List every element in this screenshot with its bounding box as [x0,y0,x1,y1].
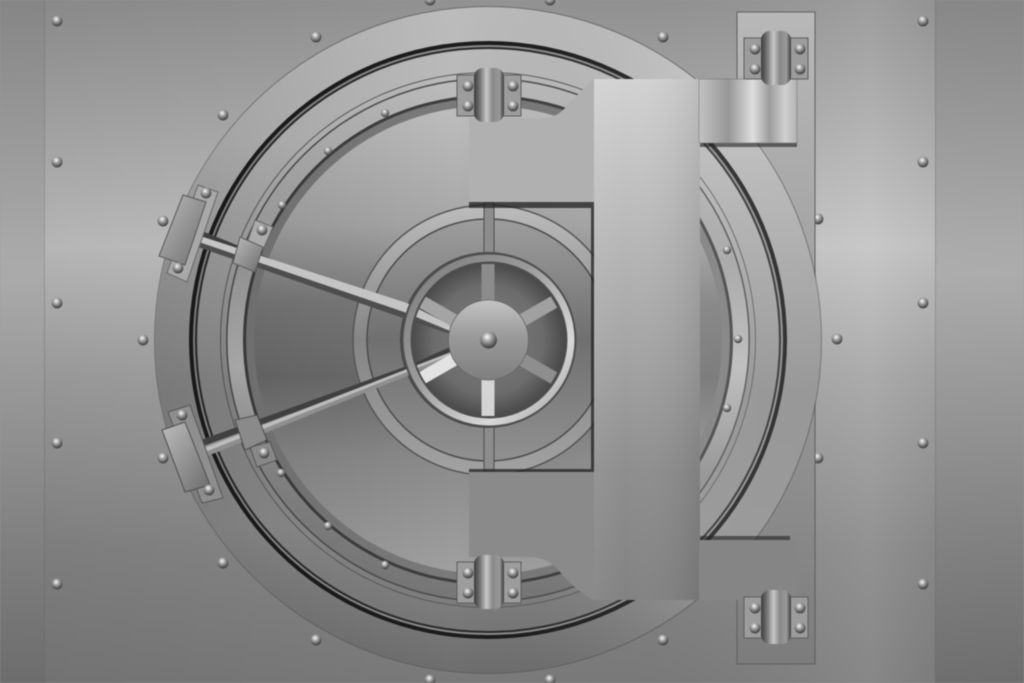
handwheel [407,258,571,422]
locking bars [195,229,452,459]
top arm [699,79,797,143]
vertical column [594,79,700,600]
lower recess plate [469,472,594,600]
door clamps [457,31,808,644]
upper recess plate [469,79,594,202]
vault door: concentric rings [154,6,822,674]
hub bolt [480,332,497,348]
door ring rivets [277,109,742,569]
large hinge arm and recess plate [469,79,797,600]
inner dial rings [353,202,623,478]
left bolt blocks [159,185,277,503]
recess shadow [469,202,594,472]
shadow on rings beneath arm [700,143,797,541]
hinge mounting plate [737,12,815,664]
wheel spokes [422,264,554,416]
bottom arm [699,540,797,600]
wheel hub [448,300,528,380]
